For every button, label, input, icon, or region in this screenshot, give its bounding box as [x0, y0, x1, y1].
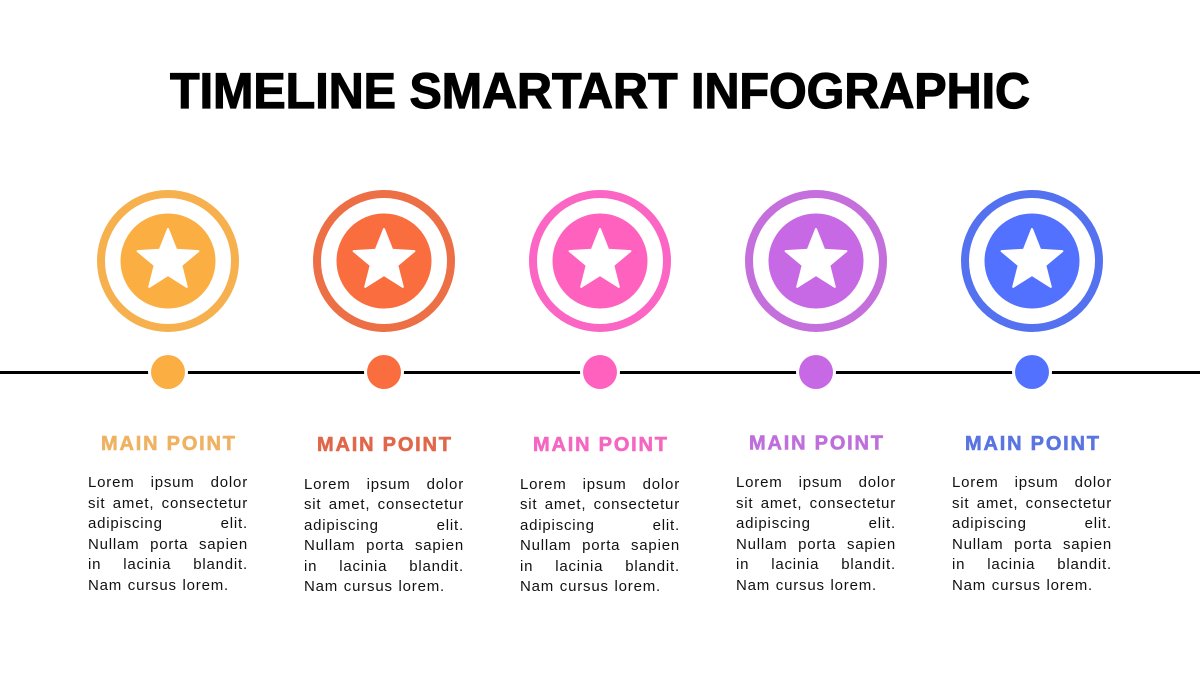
timeline axis: [0, 371, 1200, 374]
body text 4: Lorem ipsum dolor: [736, 474, 896, 491]
icon: purple star badge: [745, 190, 887, 389]
body text 2: adipiscing elit.: [304, 517, 464, 534]
body text 4: adipiscing elit.: [736, 515, 896, 532]
body text 2: in lacinia blandit.: [304, 558, 464, 575]
icon: blue star badge: [961, 190, 1103, 389]
icon: red star badge: [313, 190, 455, 389]
body text 3: [520, 476, 680, 595]
icon: pink star badge: [529, 190, 671, 389]
body text 1: Nam cursus lorem.: [88, 577, 229, 594]
title: TIMELINE SMARTART INFOGRAPHIC: [170, 63, 1030, 119]
body text 1: sit amet, consectetur: [88, 495, 248, 512]
body text 4: in lacinia blandit.: [736, 556, 896, 573]
body text 1: [88, 474, 248, 594]
heading: main point 5: MAIN POINT: [965, 433, 1099, 455]
body text 1: adipiscing elit.: [88, 515, 248, 532]
heading: main point 4: MAIN POINT: [749, 432, 883, 454]
body text 2: Nam cursus lorem.: [304, 578, 445, 595]
body text 5: adipiscing elit.: [952, 515, 1112, 532]
body text 5: Nullam porta sapien: [952, 536, 1112, 553]
body text 3: adipiscing elit.: [520, 517, 680, 534]
heading: main point 3: MAIN POINT: [533, 434, 667, 456]
body text 4: Nullam porta sapien: [736, 536, 896, 553]
column 5: blue: [952, 190, 1112, 594]
body text 1: Lorem ipsum dolor: [88, 474, 248, 491]
body text 3: sit amet, consectetur: [520, 496, 680, 513]
body text 3: Nam cursus lorem.: [520, 578, 661, 595]
body text 4: sit amet, consectetur: [736, 495, 896, 512]
body text 5: [952, 474, 1112, 594]
column 1: orange: [88, 190, 248, 594]
icon: orange star badge: [97, 190, 239, 389]
body text 2: Lorem ipsum dolor: [304, 476, 464, 492]
body text 2: [304, 476, 464, 595]
body text 2: Nullam porta sapien: [304, 537, 464, 554]
body text 4: [736, 474, 896, 594]
body text 3: Lorem ipsum dolor: [520, 476, 680, 492]
body text 4: Nam cursus lorem.: [736, 577, 877, 594]
body text 5: Nam cursus lorem.: [952, 577, 1093, 594]
body text 2: sit amet, consectetur: [304, 496, 464, 513]
heading: main point 1: MAIN POINT: [101, 433, 235, 455]
body text 5: sit amet, consectetur: [952, 495, 1112, 512]
column 4: purple: [736, 190, 896, 594]
body text 1: Nullam porta sapien: [88, 536, 248, 553]
body text 1: in lacinia blandit.: [88, 556, 248, 573]
heading: main point 2: MAIN POINT: [317, 434, 451, 456]
body text 5: Lorem ipsum dolor: [952, 474, 1112, 491]
column 3: pink: [520, 190, 680, 595]
body text 3: in lacinia blandit.: [520, 558, 680, 575]
body text 5: in lacinia blandit.: [952, 556, 1112, 573]
column 2: red: [304, 190, 464, 595]
body text 3: Nullam porta sapien: [520, 537, 680, 554]
